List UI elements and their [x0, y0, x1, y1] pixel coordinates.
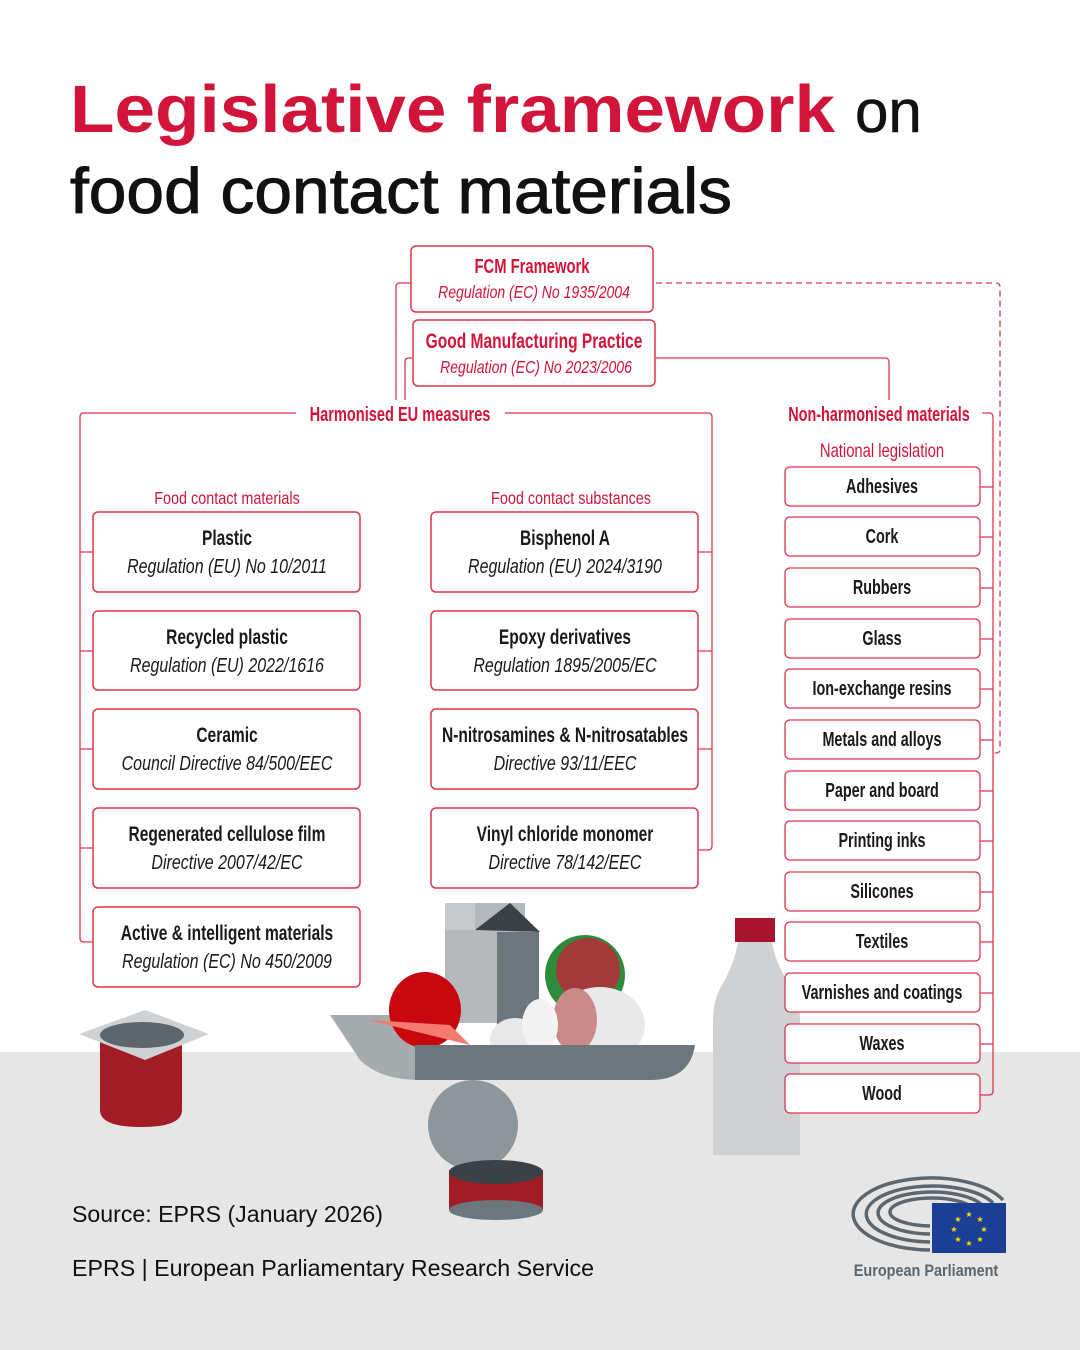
- column: national legislation boxes: Waxes: [859, 1032, 905, 1055]
- logo: European Parliament: ★: [980, 1225, 988, 1234]
- column: food contact substances: N-nitrosamines & N-nitrosatables: [442, 723, 688, 747]
- column: food contact substances: Directive 78/142/EEC: [489, 851, 642, 873]
- column: food contact materials: Regenerated cellulose film: [129, 822, 325, 846]
- column: national legislation boxes: Paper and board: [825, 779, 939, 802]
- connectors: [80, 283, 1000, 1095]
- heading: non-harmonised: Non-harmonised materials: [788, 403, 970, 426]
- title: Legislative framework: [70, 72, 836, 147]
- box: FCM Framework: Regulation (EC) No 1935/2004: [438, 282, 630, 302]
- column: food contact materials: Active & intelligent materials: [121, 921, 333, 945]
- column: national legislation boxes: Textiles: [856, 930, 908, 953]
- logo: European Parliament: ★: [954, 1215, 962, 1224]
- column: food contact substances: Regulation 1895/2005/EC: [473, 654, 657, 676]
- box: Good Manufacturing Practice: [413, 320, 655, 386]
- column: national legislation boxes: Rubbers: [853, 576, 911, 599]
- title: [70, 72, 922, 227]
- title: food contact materials: [70, 155, 732, 227]
- logo: European Parliament: ★: [950, 1225, 958, 1234]
- logo: European Parliament: European Parliament: [854, 1262, 999, 1280]
- illustration: bottle: [713, 918, 800, 1155]
- column: food contact materials: [93, 512, 360, 987]
- column: food contact materials: Regulation (EU) 2022/1616: [130, 654, 325, 676]
- column: national legislation boxes: Printing inks: [838, 829, 926, 852]
- column: national legislation boxes: Wood: [862, 1082, 902, 1105]
- column: food contact substances: Bisphenol A: [520, 526, 610, 550]
- column: national legislation boxes: Adhesives: [846, 475, 918, 498]
- logo: European Parliament: ★: [976, 1215, 984, 1224]
- logo: European Parliament: [853, 1178, 1006, 1280]
- logo: European Parliament: ★: [954, 1235, 962, 1244]
- column: food contact materials: Council Directive 84/500/EEC: [122, 752, 333, 774]
- box: FCM Framework: [411, 246, 653, 312]
- column: food contact substances: Regulation (EU) 2024/3190: [468, 555, 662, 577]
- column: food contact substances: Epoxy derivatives: [499, 625, 631, 649]
- column: food contact materials: Plastic: [202, 526, 252, 550]
- logo: European Parliament: ★: [976, 1235, 984, 1244]
- column: national legislation boxes: Cork: [866, 525, 899, 548]
- subheading: food contact materials: Food contact materials: [154, 489, 300, 508]
- column: food contact materials: Recycled plastic: [166, 625, 288, 649]
- source text: Source: EPRS (January 2026): [72, 1201, 383, 1227]
- logo: European Parliament: ★: [965, 1239, 973, 1248]
- column: food contact substances: Vinyl chloride monomer: [477, 822, 653, 846]
- logo: European Parliament: ★: [965, 1210, 973, 1219]
- column: national legislation boxes: [785, 467, 980, 1113]
- column: national legislation boxes: Silicones: [850, 880, 914, 903]
- column: national legislation boxes: Ion-exchange resins: [812, 677, 952, 700]
- subheading: national legislation: National legislation: [820, 440, 944, 461]
- footer text: EPRS | European Parliamentary Research Service: [72, 1255, 594, 1281]
- column: national legislation boxes: Glass: [862, 627, 902, 650]
- illustration: yoghurt cup: [79, 1010, 209, 1127]
- box: FCM Framework: FCM Framework: [474, 255, 590, 278]
- background band: [0, 1052, 1080, 1350]
- illustration: food tray: [330, 903, 695, 1080]
- box: Good Manufacturing Practice: Regulation (EC) No 2023/2006: [440, 357, 632, 377]
- column: national legislation boxes: Varnishes and coatings: [802, 981, 962, 1004]
- heading: harmonised: Harmonised EU measures: [310, 403, 491, 426]
- illustration: can: [428, 1080, 543, 1220]
- box: Good Manufacturing Practice: Good Manufacturing Practice: [426, 329, 642, 353]
- column: food contact materials: Directive 2007/42/EC: [151, 851, 303, 873]
- column: food contact materials: Ceramic: [196, 723, 258, 747]
- title: on: [855, 78, 922, 145]
- column: food contact materials: Regulation (EU) No 10/2011: [127, 555, 327, 577]
- column: food contact substances: Directive 93/11/EEC: [494, 752, 637, 774]
- column: national legislation boxes: Metals and alloys: [822, 728, 942, 751]
- subheading: food contact substances: Food contact substances: [491, 489, 651, 508]
- column: food contact substances: [431, 512, 698, 888]
- column: food contact materials: Regulation (EC) No 450/2009: [122, 950, 332, 972]
